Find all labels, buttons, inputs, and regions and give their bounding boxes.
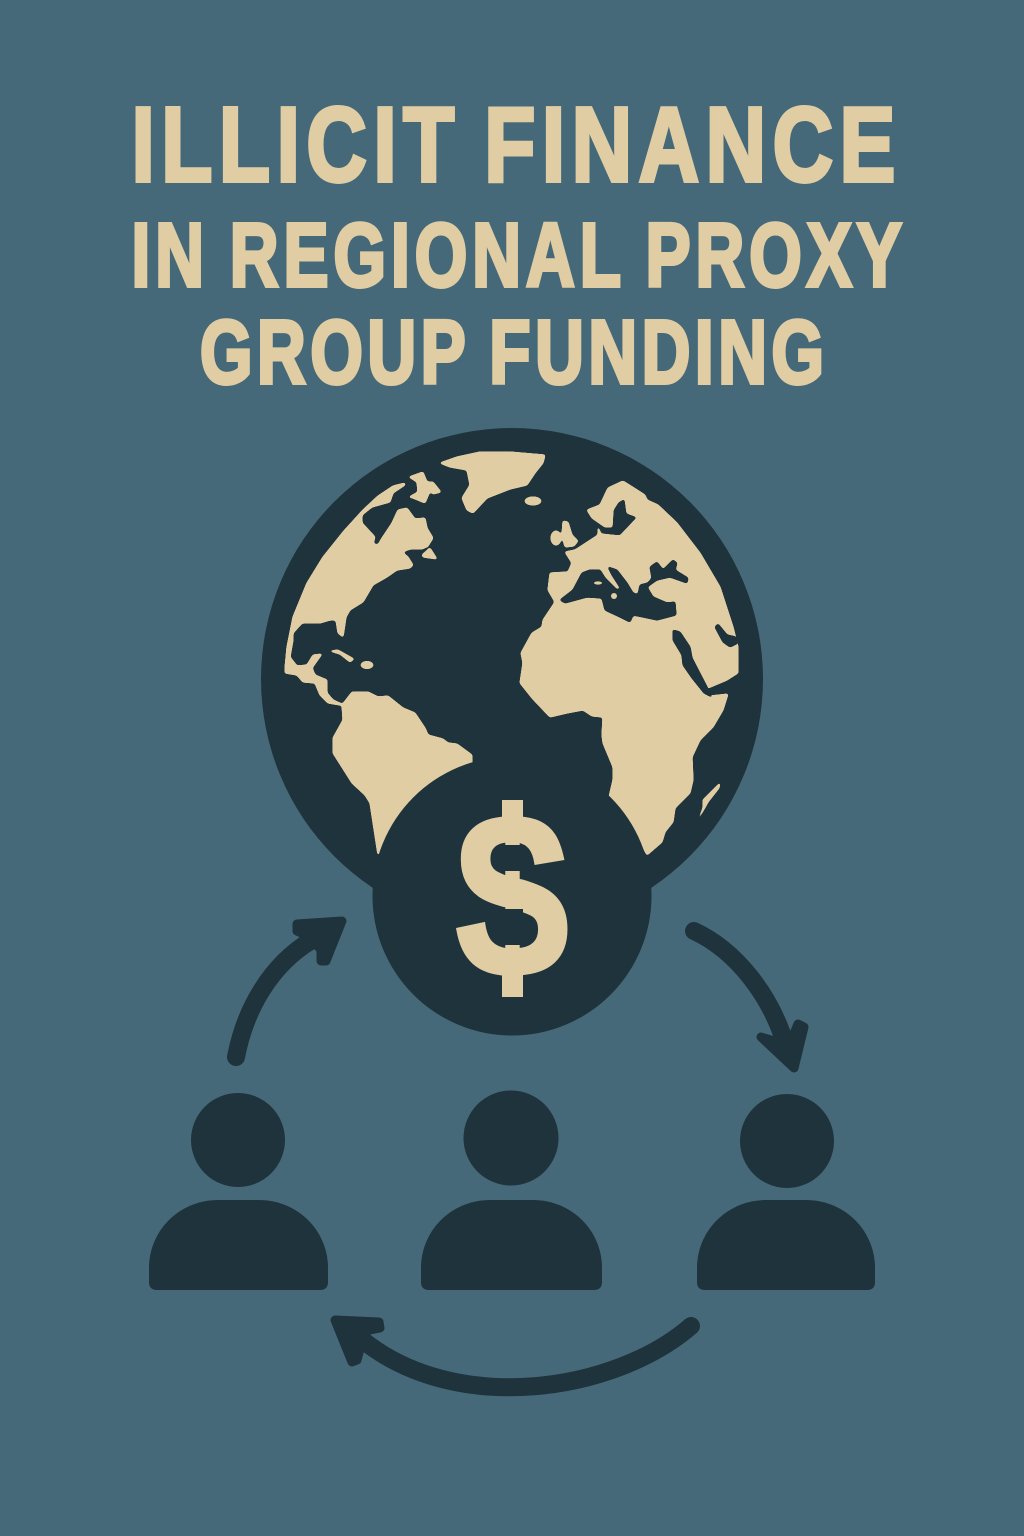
title line 3: GROUP FUNDING <box>200 302 824 402</box>
globe disc <box>261 428 763 930</box>
Hispaniola <box>361 662 373 668</box>
person right <box>697 1094 875 1290</box>
Ireland <box>551 531 561 545</box>
title <box>132 87 902 402</box>
Madagascar <box>698 783 720 820</box>
Mediterranean islands <box>594 581 617 599</box>
dollar sign: $ <box>455 766 569 1026</box>
arrow: right to left along bottom <box>335 1320 691 1387</box>
South America <box>333 692 472 855</box>
Red Sea <box>673 630 712 697</box>
Iceland <box>525 497 541 505</box>
Great Britain <box>562 521 578 547</box>
arrow: coin to right person <box>694 931 804 1068</box>
people <box>149 1090 875 1290</box>
person centre <box>421 1090 602 1290</box>
person left <box>149 1093 328 1290</box>
coin <box>372 756 652 1036</box>
Eurasia and Africa <box>520 481 738 855</box>
Sardinia <box>594 581 602 585</box>
Mediterranean and Black Sea <box>560 560 688 622</box>
Persian Gulf <box>715 624 738 647</box>
Cuba <box>330 650 354 662</box>
North and Central America <box>285 483 433 705</box>
continents <box>285 452 738 855</box>
title line 1: ILLICIT FINANCE <box>132 87 895 204</box>
arrows <box>236 921 804 1387</box>
seas <box>560 560 738 697</box>
Greenland <box>440 452 545 513</box>
title line 2: IN REGIONAL PROXY <box>132 205 902 305</box>
Newfoundland <box>422 548 437 559</box>
Sicily <box>611 593 617 599</box>
Baffin Island <box>409 472 441 503</box>
icon: globe with dollar coin <box>261 428 763 1036</box>
arrow: up to coin <box>236 921 342 1057</box>
